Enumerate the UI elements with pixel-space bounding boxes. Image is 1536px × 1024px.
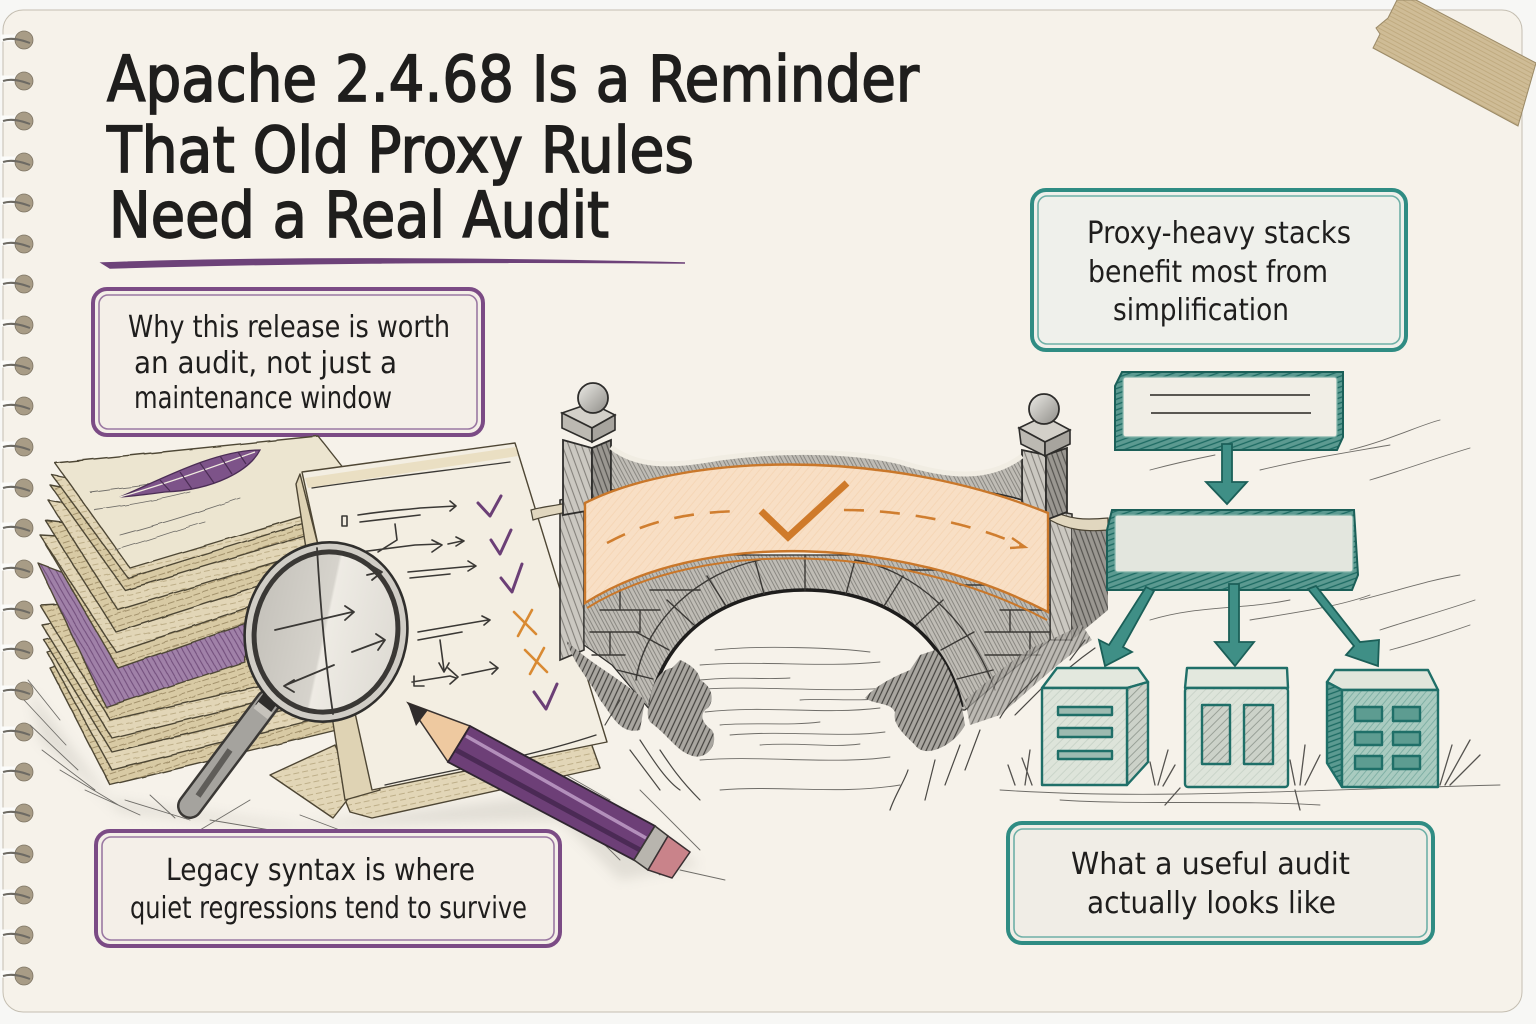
callout: legacy syntax: Legacy syntax is where	[166, 853, 475, 888]
railing	[611, 447, 1022, 500]
dashed route arrow	[607, 511, 742, 543]
callout: proxy-heavy stacks: simplification	[1113, 293, 1289, 328]
callout: why this release: an audit, not just a	[134, 346, 397, 381]
callout: why this release: Why this release is worth	[128, 310, 450, 345]
river and bushes	[566, 625, 1095, 810]
callout: proxy-heavy stacks: benefit most from	[1088, 255, 1328, 290]
left end panel	[560, 495, 584, 660]
title: Apache 2.4.68 Is a Reminder	[107, 43, 919, 116]
icon: purple pencil	[408, 703, 690, 878]
title	[106, 43, 919, 252]
left post	[562, 383, 615, 515]
callout: why this release: maintenance window	[134, 381, 392, 416]
illustration: stack of old proxy config papers	[38, 436, 345, 785]
purple sheet	[38, 563, 250, 707]
title: Need a Real Audit	[109, 179, 609, 252]
callout: legacy syntax	[96, 831, 560, 946]
flow sketch arrows	[342, 501, 498, 686]
ground shading under papers	[24, 680, 725, 880]
illustration: checklist page	[270, 443, 607, 818]
callout: what a useful audit: What a useful audit	[1071, 847, 1350, 882]
block: six cell grid	[1327, 670, 1438, 787]
callout: what a useful audit	[1008, 823, 1433, 943]
callout: proxy-heavy stacks: Proxy-heavy stacks	[1087, 216, 1351, 251]
icon: feather	[120, 450, 260, 497]
diagram: middle proxy box	[1107, 510, 1358, 590]
masking tape	[1373, 0, 1536, 126]
orange deck band	[585, 464, 1048, 612]
right post	[1019, 394, 1070, 520]
arrow: middle box to centre block	[1215, 584, 1254, 666]
diagram: top proxy box	[1115, 372, 1343, 450]
block: two columns	[1185, 668, 1288, 787]
arch opening	[648, 590, 965, 765]
callout: why this release	[93, 289, 483, 435]
top sheet	[55, 436, 345, 568]
grass tufts	[1008, 740, 1480, 810]
arrow: middle box to left block	[1099, 587, 1154, 666]
icon: magnifying glass	[190, 527, 424, 806]
title: That Old Proxy Rules	[106, 114, 694, 187]
arrow: middle box to right block	[1308, 586, 1379, 666]
icon: orange check	[761, 483, 847, 537]
arrow: top box to middle box	[1206, 444, 1247, 504]
callout: proxy-heavy stacks	[1032, 190, 1406, 350]
callout: legacy syntax: quiet regressions tend to survive	[130, 891, 527, 926]
illustration: stone bridge	[531, 383, 1108, 765]
title underline	[102, 259, 685, 268]
right end panel	[1050, 510, 1072, 640]
block: three stacked rows	[1042, 668, 1148, 785]
callout: what a useful audit: actually looks like	[1087, 886, 1336, 921]
diagram: ground shading	[1000, 420, 1500, 805]
spiral binding rings	[1, 31, 33, 985]
marks: checks and crosses	[478, 496, 557, 709]
stone wall	[584, 555, 1050, 710]
